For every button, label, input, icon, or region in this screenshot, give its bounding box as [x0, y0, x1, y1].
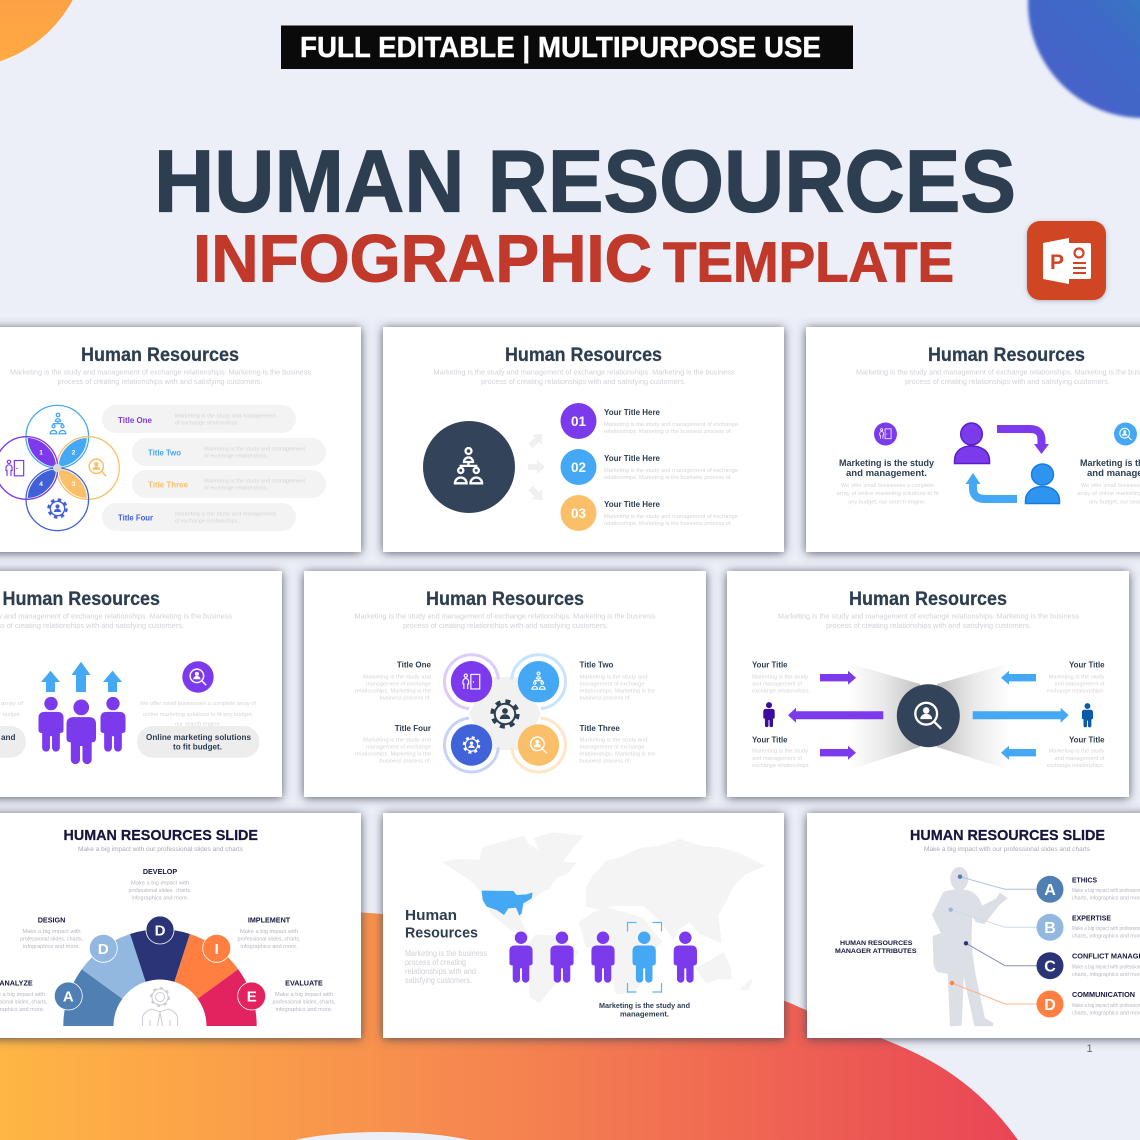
- panel: bow-tie slide: process of creating relationships with and satisfying customers.: [826, 621, 1031, 630]
- label: implement: [238, 915, 301, 950]
- panel: manager attributes slide: HUMAN RESOURCES SLIDE: [910, 827, 1105, 844]
- label: title three: Title Three: [580, 724, 620, 733]
- text top right: and management of: [1054, 681, 1105, 687]
- left caption: HUMAN RESOURCES: [840, 940, 913, 947]
- connector D: [950, 981, 1064, 1018]
- right note: our search engine.: [175, 722, 221, 728]
- connector B: B: [1044, 920, 1056, 937]
- label: title two: business process of.: [580, 695, 631, 701]
- list item 01: Marketing is the study and management of exchange: [604, 422, 738, 428]
- label: title three: relationships. Marketing is the: [580, 752, 656, 758]
- panel: exchange slide: process of creating relationships with and satisfying customers.: [905, 377, 1110, 386]
- panel: ADDIE semicircle slide: HUMAN RESOURCES SLIDE: [64, 827, 258, 844]
- label: analyze: ANALYZE: [0, 979, 33, 988]
- label: title three: [580, 724, 656, 765]
- circle four: [445, 718, 498, 772]
- panel: manager attributes slide: [807, 813, 1140, 1038]
- text bottom left: Your Title: [752, 735, 788, 744]
- label: title one: management of exchange: [366, 681, 431, 687]
- circle one: [445, 655, 498, 709]
- panel: manager attributes slide: Make a big impact with our professional slides and charts: [924, 846, 1091, 853]
- panel: bow-tie slide: [727, 571, 1129, 797]
- label: title three: business process of.: [580, 759, 631, 765]
- circle two: [512, 655, 565, 709]
- attribute: communication: COMMUNICATION: [1072, 990, 1135, 999]
- list item 01: Your Title Here: [604, 408, 661, 417]
- list item 03: Marketing is the study and management of exchange: [604, 514, 738, 520]
- label: title two: relationships. Marketing is the: [580, 688, 656, 694]
- page number: 1: [1086, 1043, 1093, 1055]
- panel: numbered list slide: Human Resources: [505, 345, 662, 366]
- panel: numbered list slide: Marketing is the study and management of exchange relationships. Marketing is the business: [434, 368, 735, 376]
- main title: HUMAN RESOURCES: [154, 132, 1016, 230]
- semicircle chart: D: [98, 941, 109, 958]
- list item 02: 02: [571, 460, 586, 475]
- pill: title two: Marketing is the study and management: [204, 446, 305, 452]
- left column: array of online marketing solutions to fit: [836, 491, 939, 497]
- text bottom left: and management of: [752, 756, 802, 762]
- attribute: expertise: EXPERTISE: [1072, 913, 1111, 922]
- venn diagram: 2: [72, 450, 76, 456]
- label: implement: IMPLEMENT: [248, 915, 291, 924]
- right note: online marketing solutions to fit any budget,: [143, 712, 253, 718]
- semicircle chart: E: [247, 988, 257, 1006]
- semicircle chart: A: [63, 988, 74, 1006]
- pill: title one: [102, 405, 296, 433]
- right note: We offer small businesses a complete array of: [140, 701, 256, 707]
- panel: ADDIE semicircle slide: [0, 813, 361, 1038]
- heading: Resources: [405, 924, 478, 941]
- text top left: [752, 661, 810, 694]
- label: design: DESIGN: [38, 915, 65, 924]
- blue arrows: [973, 671, 1069, 760]
- pill: title four: Title Four: [118, 514, 153, 522]
- label: analyze: [0, 979, 48, 1013]
- pill: title two: of exchange relationships.: [204, 454, 268, 460]
- label: title two: Marketing is the study and: [580, 674, 648, 680]
- label: implement: professional slides, charts,: [238, 936, 301, 942]
- hub circle: [423, 421, 515, 513]
- panel: numbered list slide: process of creating relationships with and satisfying customers.: [481, 377, 686, 386]
- list item 03: Your Title Here: [604, 500, 661, 509]
- label: implement: infographics and more.: [240, 944, 298, 950]
- panel: exchange slide: Human Resources: [928, 345, 1085, 366]
- pill: title four: [102, 503, 296, 531]
- pill: title one: Marketing is the study and management: [175, 414, 276, 420]
- text bottom right: exchange relationships.: [1046, 763, 1105, 769]
- text top right: Your Title: [1069, 661, 1105, 670]
- center search circle: [897, 684, 960, 747]
- right funnel: [937, 663, 1010, 770]
- label: develop: DEVELOP: [143, 867, 177, 876]
- label: evaluate: infographics and more.: [276, 1007, 333, 1013]
- panel: venn slide: Human Resources: [81, 345, 239, 366]
- label: title three: management of exchange: [580, 745, 644, 751]
- label: title two: [580, 661, 656, 701]
- list item 01: 01: [571, 414, 586, 429]
- text bottom right: Marketing is the study: [1048, 749, 1105, 755]
- label: title one: [355, 661, 432, 701]
- panel: bow-tie slide: Marketing is the study and management of exchange relationships. Marketing is the business: [778, 612, 1079, 620]
- semicircle chart: D: [155, 922, 166, 940]
- description: Marketing is the business: [405, 949, 487, 958]
- icon: blue person: [1082, 703, 1093, 727]
- left note partial: [0, 701, 26, 758]
- left caption: MANAGER ATTRIBUTES: [835, 948, 917, 955]
- list item 02: Marketing is the study and management of exchange: [604, 468, 738, 474]
- heading: Human: [405, 907, 457, 924]
- pill: title three: Title Three: [148, 480, 189, 490]
- panel: people arrows slide: [0, 571, 282, 797]
- left column: and management.: [846, 468, 927, 478]
- label: evaluate: EVALUATE: [285, 979, 323, 988]
- label: develop: Make a big impact with: [131, 880, 189, 886]
- up arrows: [41, 662, 122, 692]
- label: title three: Marketing is the study and: [580, 738, 648, 744]
- subtitle: TEMPLATE: [663, 230, 954, 294]
- venn diagram: 4: [39, 481, 43, 488]
- USA highlight: [482, 891, 533, 916]
- caption: management.: [620, 1010, 669, 1018]
- icon: powerpoint: [1027, 221, 1106, 300]
- pill: title three: [132, 470, 326, 498]
- label: title one: business process of.: [380, 695, 431, 701]
- list item 01: [560, 403, 738, 439]
- label: evaluate: Make a big impact with: [275, 992, 333, 998]
- label: title one: Title One: [397, 661, 432, 670]
- label: design: [20, 915, 83, 950]
- label: design: infographics and more.: [23, 944, 80, 950]
- text bottom left: [752, 735, 810, 769]
- label: title four: relationships. Marketing is the: [355, 752, 431, 758]
- caption: Marketing is the study and: [599, 1001, 690, 1010]
- text bottom left: exchange relationships.: [752, 763, 810, 769]
- faded arrows: [526, 429, 547, 505]
- left column: Marketing is the study: [839, 458, 935, 468]
- panel: exchange slide: [806, 327, 1140, 552]
- text bottom right: and management of: [1054, 756, 1105, 762]
- panel: venn slide: Marketing is the study and management of exchange relationships. Marketing is the business: [10, 368, 311, 376]
- orange corner circle: [0, 0, 88, 68]
- venn diagram: 1: [39, 450, 43, 456]
- bottom light arc: [257, 1132, 507, 1140]
- attribute: conflict management: [1072, 951, 1140, 978]
- right note: to fit budget.: [173, 742, 222, 752]
- text top left: and management of: [752, 681, 802, 687]
- panel: four circles slide: Human Resources: [426, 589, 584, 610]
- list item 03: [560, 495, 738, 531]
- label: title one: Marketing is the study and: [363, 674, 431, 680]
- subtitle: [193, 222, 954, 296]
- description: relationships with and: [405, 967, 476, 976]
- pill: title three: Marketing is the study and management: [204, 478, 305, 484]
- description: satisfying customers.: [405, 976, 472, 985]
- connector A: [958, 874, 1064, 903]
- left caption: [835, 940, 917, 955]
- bottom gradient blob: [0, 911, 1018, 1140]
- label: title two: Title Two: [580, 661, 614, 670]
- connector D: D: [1044, 997, 1056, 1014]
- connector C: C: [1044, 958, 1056, 976]
- people row: [509, 932, 697, 983]
- blue corner circle: [1028, 0, 1140, 118]
- semicircle chart: [54, 916, 266, 1026]
- caption: [599, 1001, 690, 1018]
- connector A: A: [1044, 882, 1056, 899]
- label: title four: Title Four: [395, 724, 431, 733]
- pill: title two: [132, 438, 326, 466]
- text top right: Marketing is the study: [1048, 674, 1105, 680]
- attribute: ethics: ETHICS: [1072, 875, 1097, 884]
- left note partial: and: [1, 732, 16, 742]
- icon: manager gear: [142, 988, 178, 1026]
- panel: venn slide: [0, 327, 361, 552]
- right column: [1077, 422, 1140, 506]
- text bottom right: Your Title: [1069, 735, 1105, 744]
- panel: venn slide: process of creating relationships with and satisfying customers.: [58, 377, 262, 386]
- people group: [38, 697, 126, 764]
- pill: title one: Title One: [118, 416, 153, 425]
- connector B: [948, 908, 1064, 941]
- venn diagram: [0, 405, 119, 531]
- label: title four: Marketing is the study and: [363, 738, 431, 744]
- left funnel: [848, 663, 920, 770]
- list item 02: relationships. Marketing is the business process of.: [604, 475, 732, 481]
- list item 02: Your Title Here: [604, 454, 661, 463]
- panel: bow-tie slide: Human Resources: [849, 589, 1007, 610]
- text top left: exchange relationships.: [752, 688, 810, 694]
- text top left: Marketing is the study: [752, 674, 808, 680]
- connector C: [964, 941, 1064, 979]
- heading: [405, 907, 478, 941]
- description: process of creating: [405, 958, 466, 967]
- semicircle chart: I: [215, 941, 219, 958]
- subtitle: INFOGRAPHIC: [193, 222, 652, 296]
- label: title one: relationships. Marketing is the: [355, 688, 431, 694]
- label: evaluate: professional slides, charts,: [272, 1000, 336, 1006]
- left column: [836, 422, 939, 506]
- pill: title two: Title Two: [148, 448, 181, 458]
- label: develop: professional slides, charts,: [128, 888, 192, 894]
- circle three: [512, 718, 565, 772]
- attribute: ethics: [1072, 875, 1140, 902]
- purple arrows: [788, 671, 883, 760]
- world map: [444, 833, 763, 1002]
- label: implement: Make a big impact with: [240, 929, 298, 935]
- text bottom left: Marketing is the study: [752, 749, 808, 755]
- label: title four: management of exchange: [366, 745, 431, 751]
- manager silhouette: [933, 868, 1007, 1026]
- exchange diagram: [954, 423, 1060, 504]
- panel: four circles slide: process of creating relationships with and satisfying customers.: [403, 621, 608, 630]
- attribute: communication: [1072, 990, 1140, 1016]
- text top right: [1046, 661, 1105, 694]
- pill: title four: Marketing is the study and management: [175, 512, 276, 518]
- pill: title three: of exchange relationships.: [204, 486, 268, 492]
- left note partial: budget.: [3, 712, 21, 718]
- list item 01: relationships. Marketing is the business process of.: [604, 429, 732, 435]
- panel: numbered list slide: [383, 327, 784, 552]
- list item 03: 03: [571, 506, 586, 521]
- label: title four: business process of.: [380, 759, 431, 765]
- panel: ADDIE semicircle slide: Make a big impact with our professional slides and charts: [78, 846, 244, 853]
- label: develop: [128, 867, 192, 902]
- pill: title four: of exchange relationships.: [175, 518, 239, 524]
- icon: purple person: [763, 702, 775, 727]
- venn diagram: 3: [72, 481, 76, 488]
- text top left: Your Title: [752, 661, 788, 670]
- left column: We offer small businesses a complete: [841, 483, 934, 489]
- list item 02: [560, 449, 738, 485]
- label: title four: [355, 724, 431, 765]
- center hub: [469, 677, 541, 750]
- text bottom right: [1046, 735, 1105, 769]
- label: design: Make a big impact with: [22, 929, 80, 935]
- label: design: professional slides, charts,: [20, 936, 83, 942]
- focus brackets: [628, 922, 662, 992]
- label: evaluate: [272, 979, 336, 1013]
- pill: title one: of exchange relationships.: [175, 420, 239, 426]
- text top right: exchange relationships.: [1046, 688, 1105, 694]
- panel: four circles slide: [304, 571, 706, 797]
- description: [405, 949, 487, 985]
- panel: world map slide: [383, 813, 784, 1038]
- list item 03: relationships. Marketing is the business process of.: [604, 521, 732, 527]
- header banner: FULL EDITABLE | MULTIPURPOSE USE: [300, 32, 821, 64]
- label: title two: management of exchange: [580, 681, 644, 687]
- attribute: expertise: [1072, 913, 1140, 940]
- left note partial: array of: [1, 701, 24, 707]
- panel: four circles slide: Marketing is the study and management of exchange relationships. Marketing is the business: [354, 612, 656, 620]
- left column: any budget, our search engine.: [848, 500, 926, 506]
- label: develop: infographics and more.: [132, 896, 189, 902]
- right note: [137, 661, 260, 758]
- panel: people arrows slide: Human Resources: [2, 589, 160, 610]
- right note: Online marketing solutions: [146, 732, 251, 742]
- icon: powerpoint: P: [1050, 251, 1064, 274]
